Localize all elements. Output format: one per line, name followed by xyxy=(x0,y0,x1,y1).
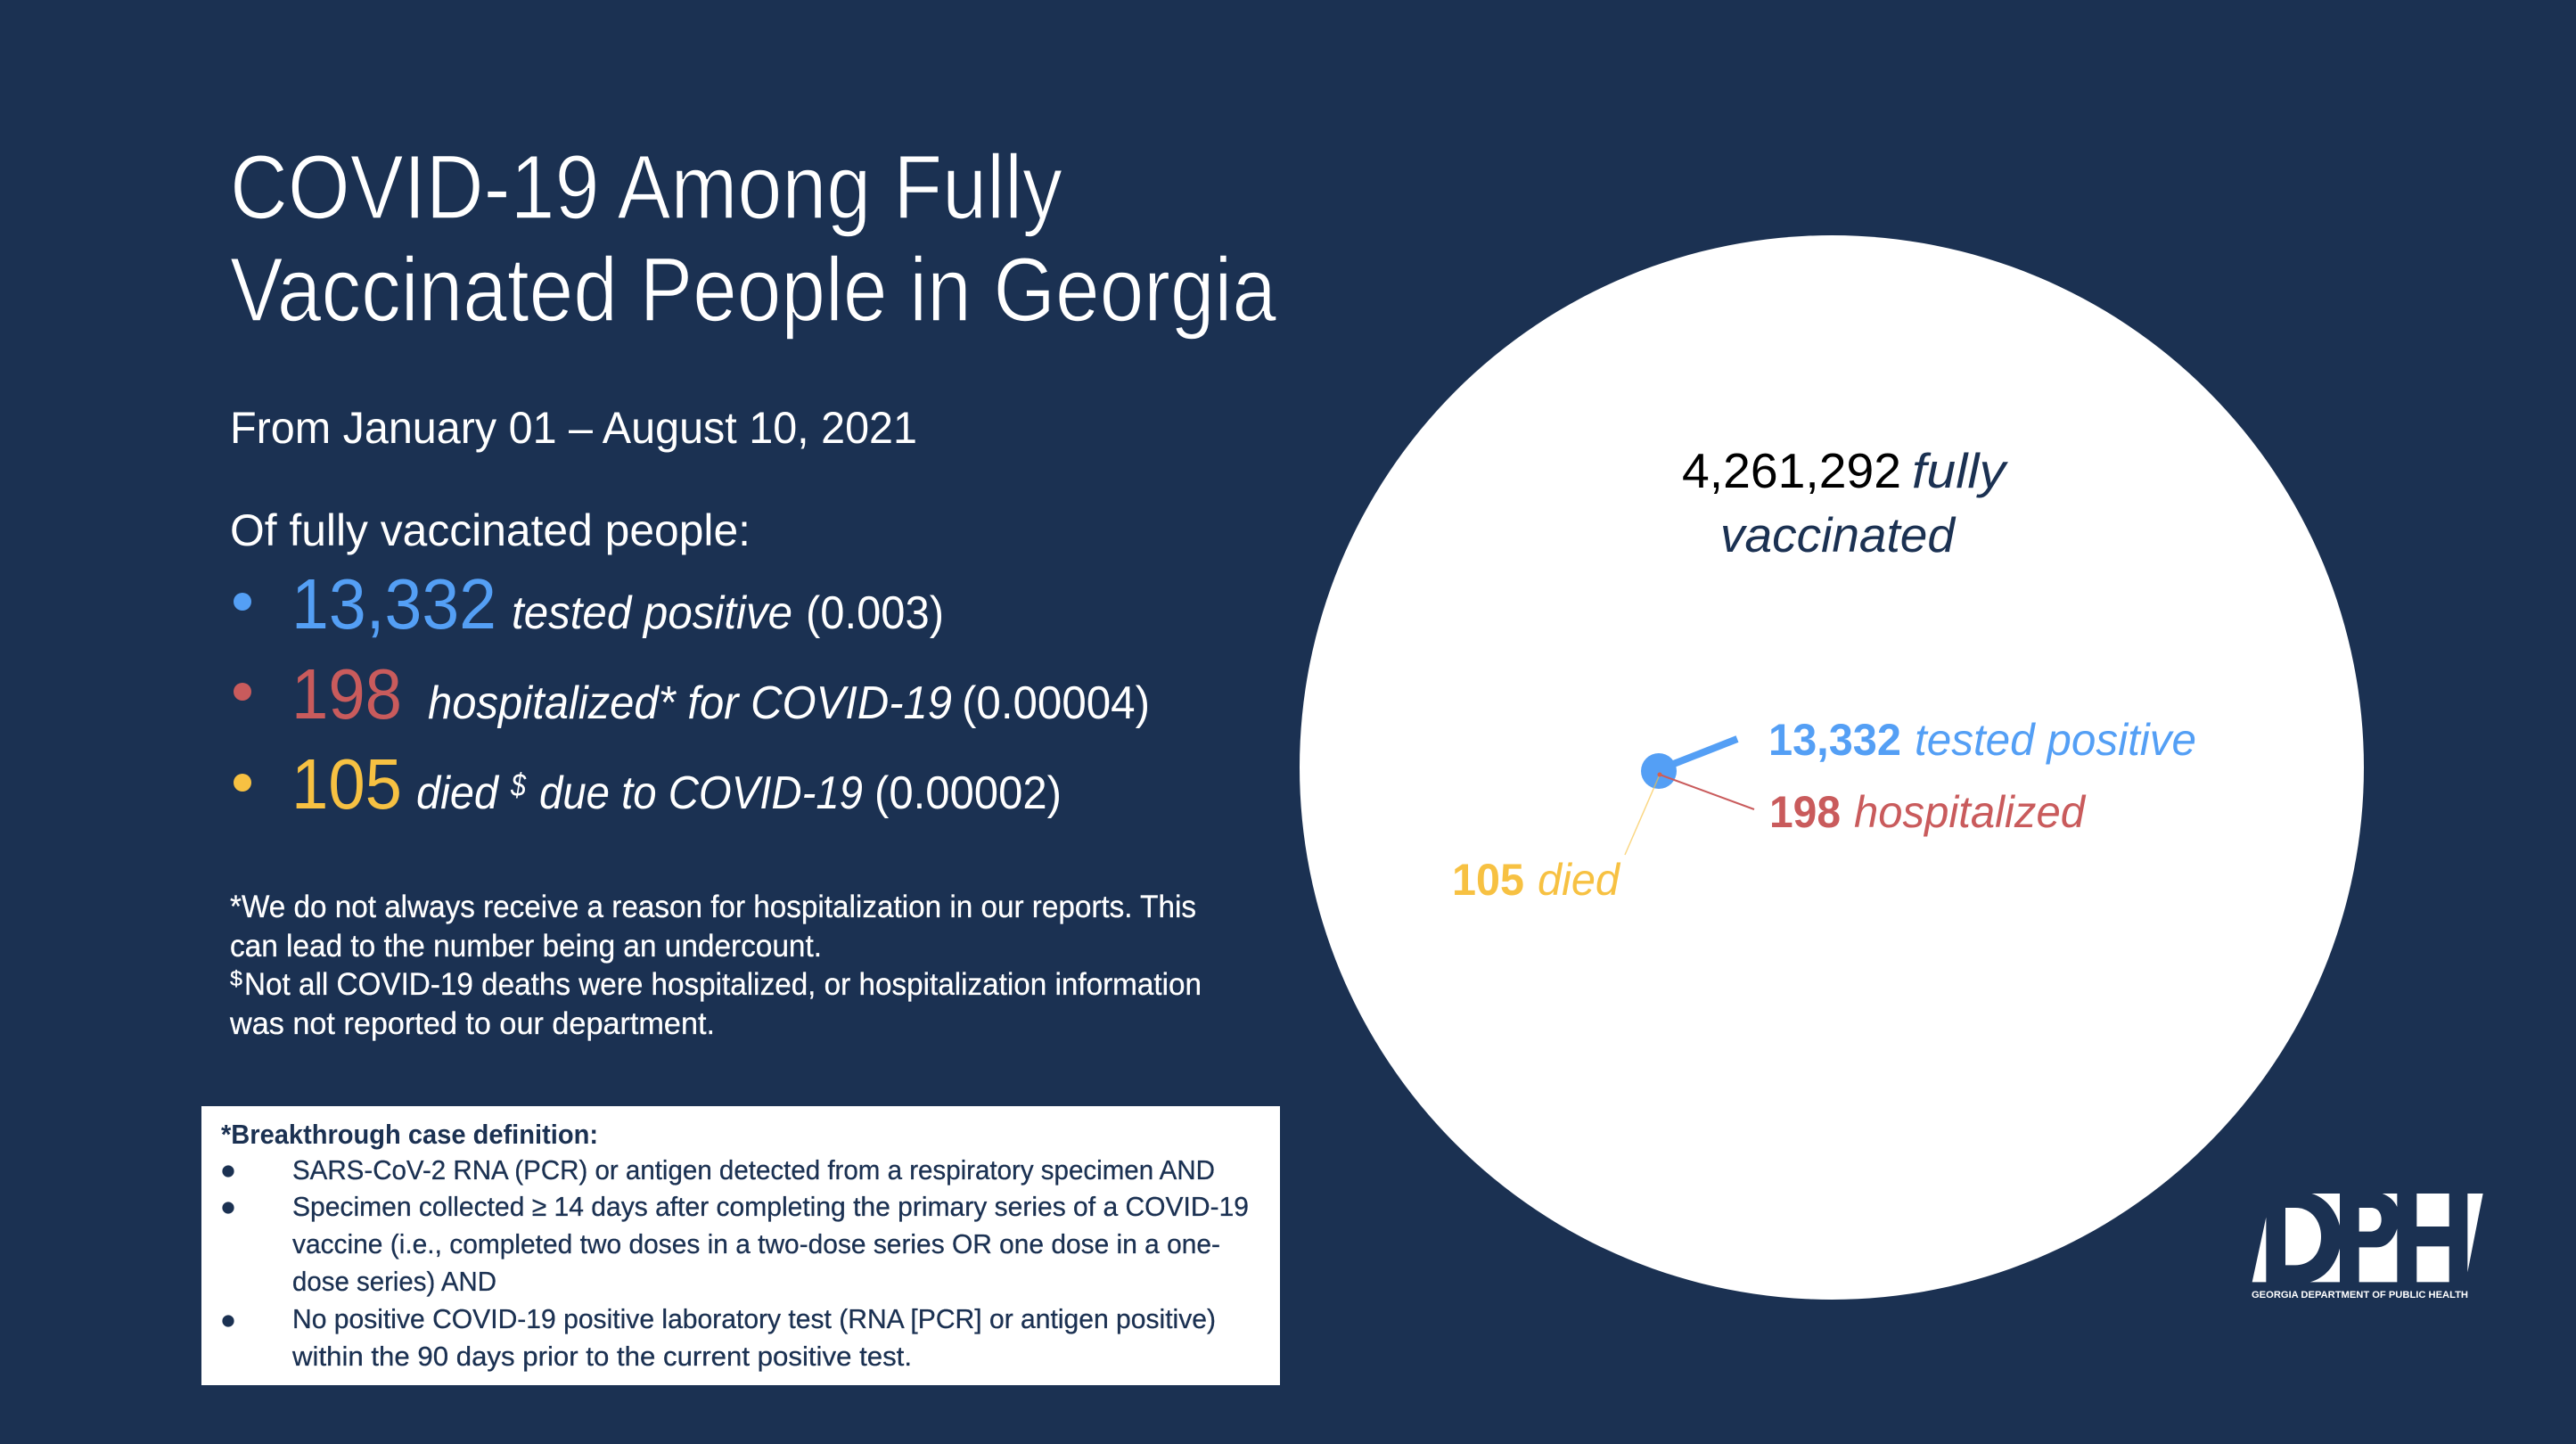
stat: died xyxy=(234,744,1062,824)
label: tested positive: tested positive xyxy=(1915,715,2196,765)
red leader xyxy=(1660,775,1754,809)
chart: proportional circle xyxy=(1300,235,2364,1300)
title: COVID-19 Among Fully xyxy=(230,136,1062,238)
stat: tested positive: tested positive xyxy=(512,587,792,639)
stat: tested positive xyxy=(234,564,944,644)
stat: tested positive: (0.003) xyxy=(806,587,944,639)
fully vaccinated label: 4,261,292 xyxy=(1682,443,1901,498)
title xyxy=(230,136,1276,340)
footnotes: *We do not always receive a reason for hospitalization in our reports. This xyxy=(230,890,1196,924)
list intro: Of fully vaccinated people: xyxy=(230,505,751,555)
definition list: within the 90 days prior to the current positive test. xyxy=(291,1341,912,1372)
panel heading: *Breakthrough case definition: xyxy=(221,1119,598,1150)
definition list: SARS-CoV-2 RNA (PCR) or antigen detected from a respiratory specimen AND xyxy=(292,1154,1215,1186)
small red marker xyxy=(1658,772,1661,777)
stat: tested positive: 13,332 xyxy=(291,564,496,644)
footnotes: Not all COVID-19 deaths were hospitalized, or hospitalization information xyxy=(244,967,1202,1002)
label: died: 105 xyxy=(1452,855,1524,905)
stat: died: due to COVID-19 xyxy=(539,767,863,819)
title: Vaccinated People in Georgia xyxy=(230,239,1276,340)
definition list: dose series) AND xyxy=(292,1266,496,1297)
stat: died: died xyxy=(416,767,500,819)
fully vaccinated circle xyxy=(1300,235,2364,1300)
icon: DPH logo: GEORGIA DEPARTMENT OF PUBLIC HEALTH xyxy=(2252,1290,2468,1300)
stat: hospitalized: hospitalized* for COVID-19 xyxy=(428,677,952,729)
icon: DPH logo xyxy=(2252,1194,2483,1300)
definition list xyxy=(223,1154,1249,1372)
stat: hospitalized xyxy=(234,654,1150,734)
stat: died: $ xyxy=(510,767,527,803)
stat: died: 105 xyxy=(291,744,402,824)
yellow leader xyxy=(1625,775,1660,855)
stat: died: (0.00002) xyxy=(874,767,1062,819)
label: died: died xyxy=(1538,855,1621,905)
definition list: No positive COVID-19 positive laboratory test (RNA [PCR] or antigen positive) xyxy=(292,1303,1216,1334)
fully vaccinated label: fully xyxy=(1912,443,2009,498)
panel: breakthrough case definition xyxy=(201,1106,1280,1385)
footnotes: can lead to the number being an undercount. xyxy=(230,929,822,964)
label: died xyxy=(1452,855,1621,905)
footnotes: was not reported to our department. xyxy=(229,1006,715,1041)
stat: hospitalized: (0.00004) xyxy=(962,677,1150,729)
fully vaccinated label xyxy=(1682,443,2009,562)
fully vaccinated label: vaccinated xyxy=(1720,507,1957,562)
footnotes: $ xyxy=(230,967,242,991)
date range: From January 01 – August 10, 2021 xyxy=(230,403,917,453)
stat: hospitalized: 198 xyxy=(291,654,402,734)
footnotes xyxy=(229,890,1202,1041)
definition list: vaccine (i.e., completed two doses in a two-dose series OR one dose in a one- xyxy=(292,1228,1220,1259)
blue dot and leader xyxy=(1641,739,1737,789)
label: tested positive xyxy=(1768,715,2196,765)
definition list: Specimen collected ≥ 14 days after completing the primary series of a COVID-19 xyxy=(292,1191,1249,1222)
label: hospitalized: hospitalized xyxy=(1854,787,2087,837)
label: tested positive: 13,332 xyxy=(1768,715,1901,765)
label: hospitalized: 198 xyxy=(1769,787,1841,837)
